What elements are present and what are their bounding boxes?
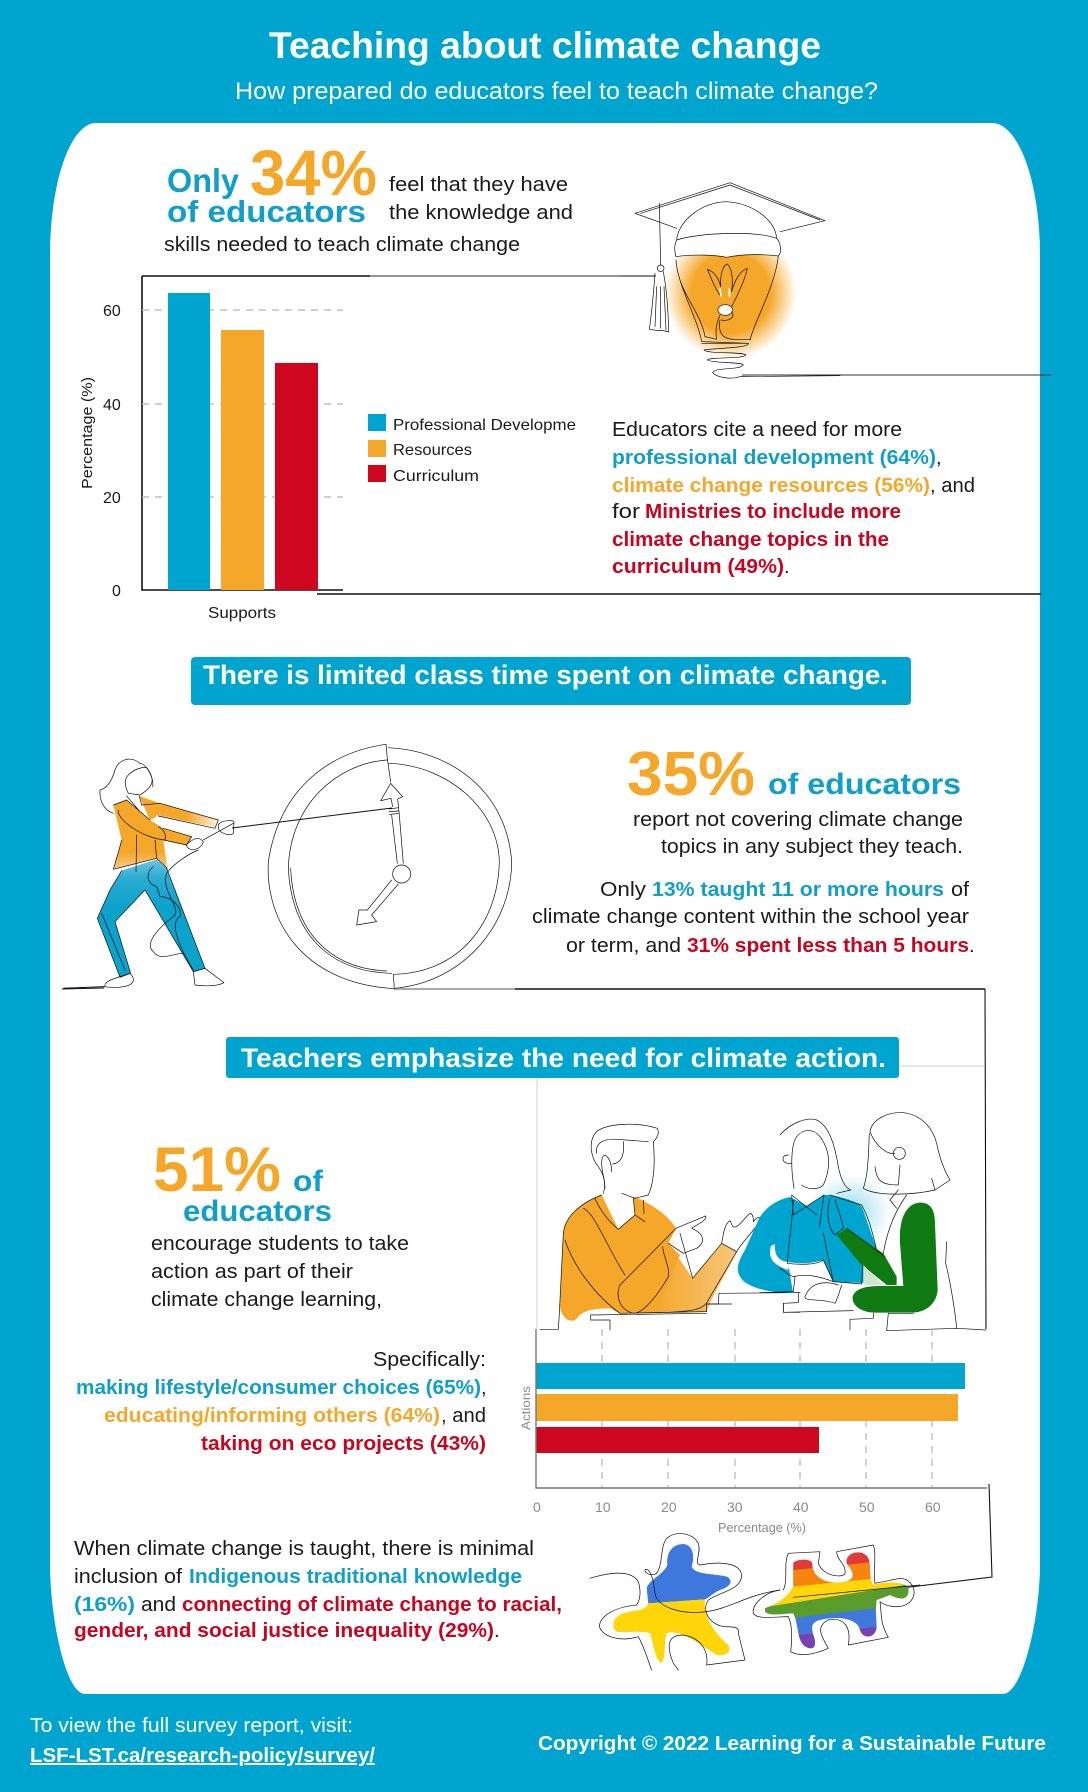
- bar chart: supports: 0: [112, 583, 121, 600]
- connector lines: clock to next section: [62, 988, 986, 1329]
- footer: survey link: [30, 1715, 375, 1767]
- text block: specifically: educating/informing others (64%): [104, 1405, 440, 1427]
- heading: limited class time: There is limited class time spent on climate change.: [203, 660, 888, 690]
- text block: minimal inclusion: Indigenous traditional knowledge: [189, 1566, 522, 1588]
- text block: educators cite a need: curriculum (49%): [612, 556, 784, 578]
- chart legend: Professional Developme: [393, 417, 576, 434]
- callout: 51% of educators: educators: [183, 1195, 332, 1228]
- text block: minimal inclusion: gender, and social justice inequality (29%): [74, 1620, 494, 1642]
- heading: need for climate action: Teachers emphasize the need for climate action.: [241, 1043, 886, 1073]
- text block: hours taught: [532, 879, 975, 957]
- callout: 35% of educators: report not covering climate change: [633, 809, 963, 831]
- illustration: three people talking: [540, 1113, 986, 1331]
- bar chart: supports: 20: [103, 490, 121, 507]
- text block: specifically: Specifically:: [373, 1349, 486, 1371]
- puzzle piece: rainbow: [753, 1540, 920, 1657]
- connector lines: first section: [317, 375, 1051, 594]
- footer: copyright: Copyright © 2022 Learning for a Sustainable Future: [538, 1733, 1046, 1755]
- callout: only 34% of educators: feel that they have: [389, 174, 568, 196]
- callout: 35% of educators: topics in any subject they teach.: [661, 836, 963, 858]
- bar chart: supports: 60: [103, 303, 121, 320]
- callout: 51% of educators: encourage students to take: [151, 1233, 409, 1255]
- callout: 35% of educators: 35%: [627, 740, 755, 809]
- text block: minimal inclusion: When climate change is taught, there is minimal: [74, 1538, 534, 1560]
- bar chart: actions: 20: [661, 1499, 677, 1515]
- bar chart: actions: 10: [595, 1499, 611, 1515]
- panel: white content card: [50, 123, 1040, 1694]
- text block: hours taught: climate change content within the school year: [532, 906, 969, 928]
- callout: only 34% of educators: Only: [167, 162, 240, 199]
- text block: educators cite a need: .: [784, 556, 790, 578]
- footer: survey link: To view the full survey report, visit:: [30, 1715, 353, 1737]
- figure: man in orange: [540, 1124, 800, 1330]
- icon: puzzle pieces: [590, 1534, 920, 1670]
- text block: minimal inclusion: inclusion of: [74, 1566, 182, 1588]
- callout: 51% of educators: [151, 1135, 409, 1311]
- bar chart: actions: 60: [925, 1499, 941, 1515]
- text block: minimal inclusion: (16%): [74, 1594, 135, 1616]
- callout: 51% of educators: of: [293, 1165, 324, 1198]
- bar chart: supports: [79, 276, 656, 622]
- text block: hours taught: .: [969, 935, 975, 957]
- figure: woman in blue: [738, 1119, 892, 1312]
- text block: hours taught: of: [951, 879, 969, 901]
- text block: educators cite a need: professional development (64%): [612, 447, 936, 469]
- text block: educators cite a need: [612, 419, 975, 578]
- callout: only 34% of educators: the knowledge and: [389, 202, 573, 224]
- icon: woman pulling clock hand: [63, 759, 234, 988]
- bar chart: actions: [519, 1329, 987, 1535]
- callout: 51% of educators: 51%: [153, 1135, 281, 1205]
- icon: clock: [268, 744, 512, 989]
- bar chart: actions: Actions: [519, 1386, 533, 1430]
- text block: educators cite a need: climate change topics in the: [612, 529, 889, 551]
- puzzle piece: blue and yellow: [590, 1534, 780, 1670]
- text block: specifically: ,: [481, 1377, 487, 1399]
- text block: minimal inclusion: and: [141, 1594, 176, 1616]
- connector line: chart to puzzle: [902, 1484, 992, 1588]
- bar chart: supports: Percentage (%): [79, 377, 96, 489]
- text block: minimal inclusion: connecting of climate change to racial,: [182, 1594, 562, 1616]
- footer: survey link: LSF-LST.ca/research-policy/survey/: [30, 1745, 375, 1767]
- callout: 51% of educators: climate change learning,: [151, 1289, 382, 1311]
- bar chart: actions: 0: [533, 1499, 541, 1515]
- callout: 35% of educators: [627, 740, 963, 858]
- bar chart: supports: 40: [103, 397, 121, 414]
- heading: limited class time: [191, 657, 911, 705]
- callout: 35% of educators: of educators: [768, 768, 961, 801]
- text block: educators cite a need: for: [612, 501, 640, 523]
- callout: only 34% of educators: [164, 137, 573, 256]
- text block: specifically: making lifestyle/consumer choices (65%): [76, 1377, 481, 1399]
- rope: [232, 808, 392, 828]
- icon: graduation cap light bulb: [620, 183, 840, 378]
- chart legend: Resources: [393, 442, 472, 459]
- text block: specifically: , and: [441, 1405, 486, 1427]
- bar chart: actions: 30: [727, 1499, 743, 1515]
- text block: hours taught: Only: [600, 879, 646, 901]
- text block: specifically: [76, 1349, 487, 1455]
- text block: educators cite a need: , and: [930, 475, 975, 497]
- bar chart: actions: Percentage (%): [718, 1520, 806, 1535]
- text block: specifically: taking on eco projects (43%): [201, 1433, 486, 1455]
- text block: educators cite a need: Ministries to include more: [645, 501, 901, 523]
- callout: only 34% of educators: of educators: [167, 194, 366, 229]
- text block: educators cite a need: ,: [936, 447, 942, 469]
- subtitle: How prepared do educators feel to teach climate change?: [235, 78, 878, 105]
- text block: hours taught: or term, and: [566, 935, 681, 957]
- text block: educators cite a need: Educators cite a need for more: [612, 419, 902, 441]
- figure: woman in green: [828, 1113, 986, 1331]
- heading: need for climate action: [226, 1037, 899, 1078]
- bar chart: supports: Supports: [208, 605, 276, 622]
- bar chart: actions: 40: [793, 1499, 809, 1515]
- chart legend: [368, 414, 576, 485]
- text block: minimal inclusion: .: [494, 1620, 500, 1642]
- text block: hours taught: 13% taught 11 or more hours: [652, 879, 944, 901]
- title: Teaching about climate change: [269, 25, 821, 66]
- callout: 51% of educators: action as part of their: [151, 1261, 353, 1283]
- bar chart: actions: 50: [859, 1499, 875, 1515]
- callout: only 34% of educators: skills needed to teach climate change: [164, 234, 520, 256]
- text block: minimal inclusion: [74, 1538, 562, 1642]
- text block: hours taught: 31% spent less than 5 hours: [687, 935, 969, 957]
- callout: only 34% of educators: 34%: [250, 137, 377, 209]
- frame line: climate action heading: [537, 1066, 984, 1329]
- text block: educators cite a need: climate change resources (56%): [612, 475, 930, 497]
- chart legend: Curriculum: [393, 468, 479, 485]
